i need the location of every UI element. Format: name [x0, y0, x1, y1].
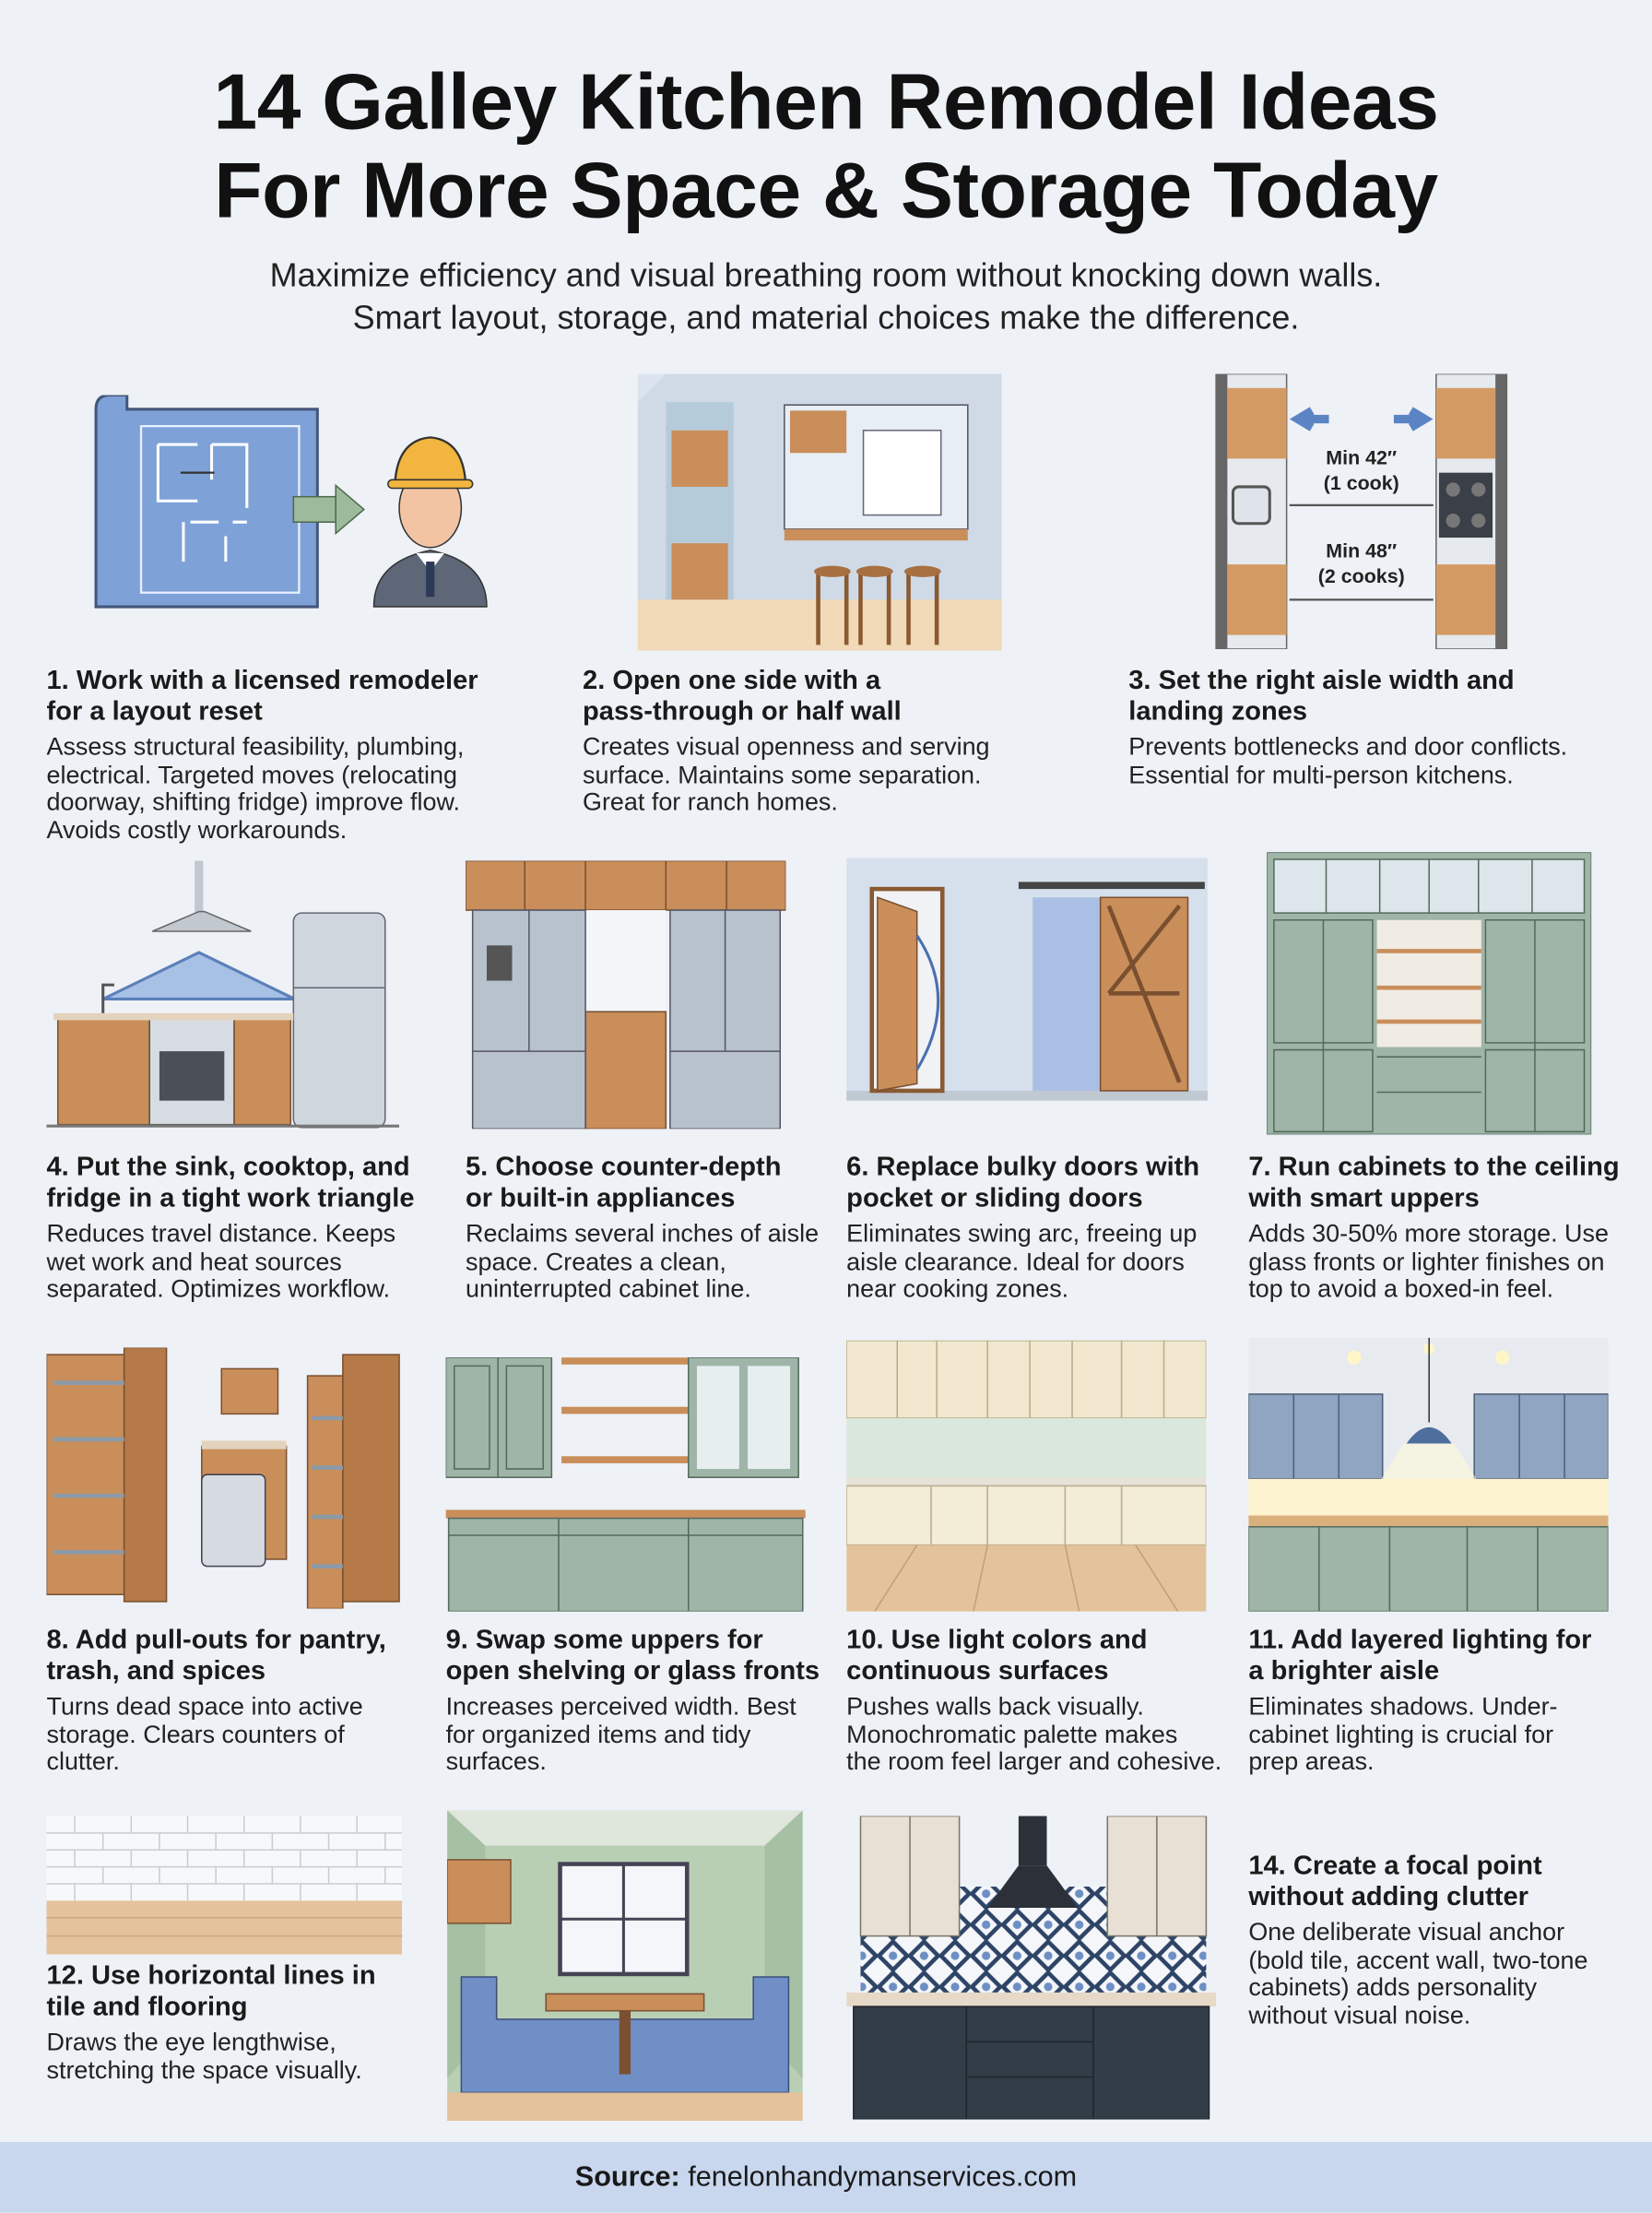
text 12: stretching the space visually. [47, 2055, 362, 2084]
text 4: fridge in a tight work triangle [47, 1184, 415, 1213]
text 7: Adds 30-50% more storage. Use [1248, 1219, 1609, 1248]
text 2: surface. Maintains some separation. [583, 760, 982, 788]
title: 14 Galley Kitchen Remodel Ideas [214, 56, 1438, 146]
title [214, 56, 1438, 234]
text 4: separated. Optimizes workflow. [47, 1274, 390, 1303]
text 7 [1248, 1153, 1620, 1303]
text 10: 10. Use light colors and [846, 1626, 1148, 1655]
text 14: without adding clutter [1248, 1882, 1528, 1912]
illustration 9: open shelving [446, 1357, 806, 1612]
text 7: top to avoid a boxed-in feel. [1248, 1274, 1553, 1303]
text 2: Creates visual openness and serving [583, 732, 990, 761]
text 12: Draws the eye lengthwise, [47, 2028, 336, 2056]
text 1 [46, 666, 478, 844]
text 7: glass fronts or lighter finishes on [1248, 1247, 1604, 1275]
illustration 13: breakfast nook [447, 1811, 803, 2121]
text 7: with smart uppers [1248, 1184, 1480, 1213]
text 10 [846, 1626, 1221, 1775]
illustration 14: focal point [846, 1817, 1216, 2119]
text 2: Great for ranch homes. [583, 787, 838, 816]
text 5: Reclaims several inches of aisle [466, 1219, 819, 1248]
text 5: space. Creates a clean, [466, 1247, 726, 1275]
subtitle: Maximize efficiency and visual breathing room without knocking down walls. [270, 257, 1382, 293]
text 6: pocket or sliding doors [846, 1184, 1143, 1213]
text 1: doorway, shifting fridge) improve flow. [47, 787, 460, 816]
illustration 8: pull-outs [46, 1348, 400, 1608]
text 3: 3. Set the right aisle width and [1128, 666, 1515, 695]
text 8: Turns dead space into active [47, 1692, 363, 1720]
footer source [0, 2142, 1652, 2213]
text 4: wet work and heat sources [47, 1247, 342, 1275]
text 9: surfaces. [446, 1747, 547, 1775]
text 6 [846, 1153, 1199, 1303]
text 11: prep areas. [1248, 1747, 1375, 1775]
text 10: the room feel larger and cohesive. [846, 1747, 1221, 1775]
text 5: 5. Choose counter-depth [466, 1153, 781, 1182]
text 1: electrical. Targeted moves (relocating [47, 760, 457, 788]
illustration 3: aisle width: Min 42″ [1326, 446, 1397, 468]
illustration 3: aisle width: (1 cook) [1324, 472, 1399, 494]
text 9: 9. Swap some uppers for [446, 1626, 763, 1655]
illustration 11: layered lighting [1248, 1337, 1609, 1612]
text 2 [583, 666, 990, 816]
text 4: 4. Put the sink, cooktop, and [47, 1153, 410, 1182]
text 1: for a layout reset [47, 697, 263, 727]
text 9: open shelving or glass fronts [446, 1657, 820, 1686]
text 8: 8. Add pull-outs for pantry, [47, 1626, 386, 1655]
illustration 3: aisle width [1215, 374, 1508, 649]
text 2: pass-through or half wall [583, 697, 902, 727]
subtitle [270, 257, 1382, 336]
text 8: storage. Clears counters of [47, 1720, 345, 1747]
text 9 [446, 1626, 820, 1775]
text 12: tile and flooring [47, 1993, 248, 2022]
text 7: 7. Run cabinets to the ceiling [1248, 1153, 1620, 1182]
text 9: for organized items and tidy [446, 1720, 750, 1747]
text 4 [46, 1153, 415, 1303]
text 3: Prevents bottlenecks and door conflicts. [1128, 732, 1567, 761]
text 6: 6. Replace bulky doors with [846, 1153, 1199, 1182]
text 1: Avoids costly workarounds. [47, 815, 347, 844]
text 10: Pushes walls back visually. [846, 1692, 1144, 1720]
illustration 4: work triangle [46, 861, 399, 1129]
text 11: a brighter aisle [1248, 1657, 1439, 1686]
text 9: Increases perceived width. Best [446, 1692, 796, 1720]
text 12: 12. Use horizontal lines in [47, 1961, 376, 1991]
text 3: Essential for multi-person kitchens. [1128, 760, 1514, 788]
text 5: uninterrupted cabinet line. [466, 1274, 751, 1303]
text 11: cabinet lighting is crucial for [1248, 1720, 1553, 1747]
text 11 [1248, 1626, 1591, 1775]
text 14: cabinets) adds personality [1248, 1973, 1537, 2001]
text 11: Eliminates shadows. Under- [1248, 1692, 1558, 1720]
title: For More Space & Storage Today [214, 146, 1438, 234]
text 5: or built-in appliances [466, 1184, 735, 1213]
illustration 2: pass-through [638, 374, 1001, 651]
text 4: Reduces travel distance. Keeps [47, 1219, 395, 1248]
illustration 6: pocket/sliding doors [846, 858, 1208, 1101]
text 11: 11. Add layered lighting for [1248, 1626, 1591, 1655]
text 6: near cooking zones. [846, 1274, 1068, 1303]
subtitle: Smart layout, storage, and material choices make the difference. [353, 299, 1299, 336]
text 3 [1128, 666, 1567, 788]
text 1: Assess structural feasibility, plumbing, [47, 732, 464, 761]
text 2: 2. Open one side with a [583, 666, 880, 695]
footer source: Source: fenelonhandymanservices.com [575, 2161, 1077, 2193]
illustration 3: aisle width: Min 48″ [1326, 539, 1397, 562]
text 3: landing zones [1128, 697, 1307, 727]
illustration 5: counter-depth appliances [466, 861, 785, 1129]
text 5 [466, 1153, 819, 1303]
illustration 3: aisle width: (2 cooks) [1318, 565, 1405, 587]
text 14: One deliberate visual anchor [1248, 1918, 1564, 1946]
text 10: Monochromatic palette makes [846, 1720, 1177, 1747]
text 6: Eliminates swing arc, freeing up [846, 1219, 1197, 1248]
illustration 7: cabinets to ceiling [1267, 852, 1591, 1134]
text 14 [1248, 1852, 1587, 2029]
text 14: without visual noise. [1248, 2001, 1470, 2029]
text 10: continuous surfaces [846, 1657, 1109, 1686]
text 6: aisle clearance. Ideal for doors [846, 1247, 1185, 1275]
text 8: clutter. [47, 1747, 120, 1775]
illustration 10: light colors [846, 1341, 1206, 1612]
text 14: 14. Create a focal point [1248, 1852, 1542, 1881]
text 1: 1. Work with a licensed remodeler [47, 666, 478, 695]
text 8 [46, 1626, 386, 1775]
text 8: trash, and spices [47, 1657, 266, 1686]
text 12 [46, 1961, 376, 2084]
illustration 1: blueprint and remodeler [94, 395, 488, 609]
text 14: (bold tile, accent wall, two-tone [1248, 1946, 1587, 1973]
illustration 12: horizontal tile [46, 1817, 402, 1955]
